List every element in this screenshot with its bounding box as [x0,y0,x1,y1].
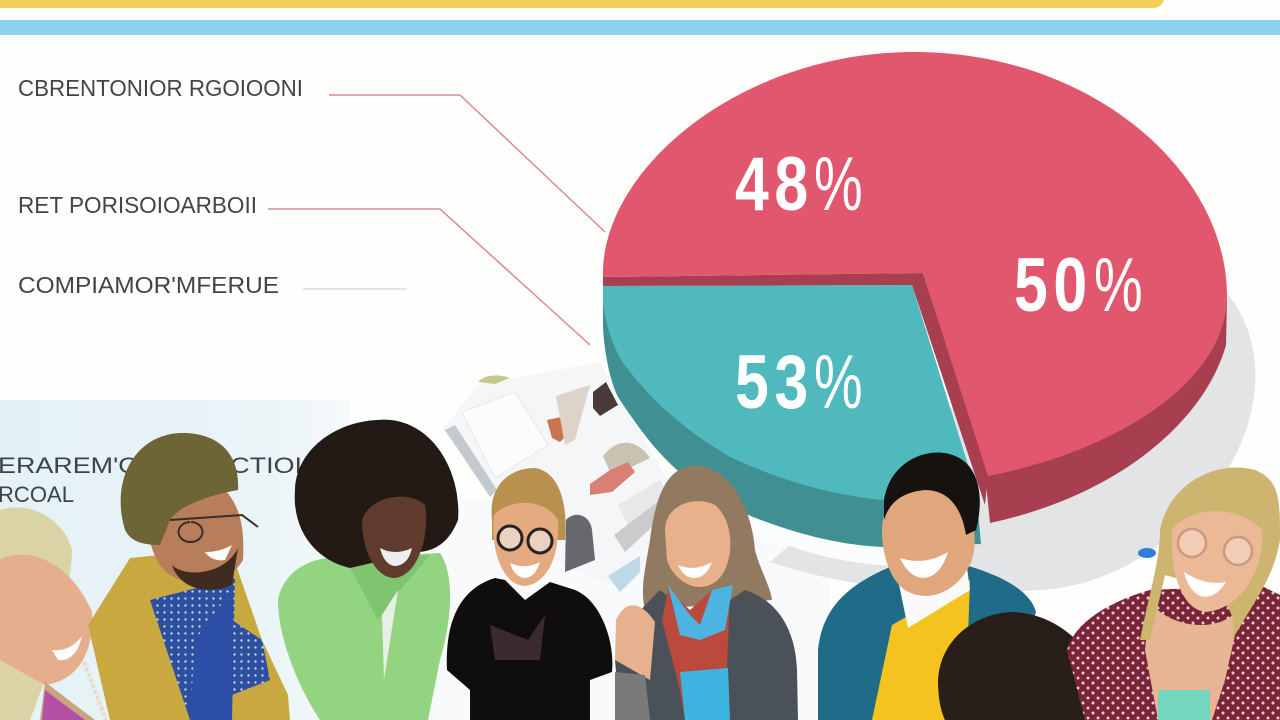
caption behind people: ERAREM'OH NCWCTIOI [0,453,302,478]
person: blonde woman with glasses in polka-dot jacket [1067,468,1280,720]
caption behind people [0,453,302,507]
person: woman with glasses in black shirt [447,468,612,720]
leader line: third category [303,288,407,290]
value: 48%: 48 [735,142,814,227]
pie: teal slice, 53% [603,285,978,500]
label: third category: COMPIAMOR'MFERUE [18,272,279,298]
blue header band [0,20,1280,35]
label: first category: CBRENTONIOR RGOIOONI [18,75,303,101]
background panel behind people [0,400,350,720]
pie: red slice, 48% and 50% [603,52,1227,476]
value: 48%: % [814,142,863,227]
person: woman with afro in green top [278,420,458,720]
leader line: first category [329,95,605,232]
person: man in blue cardigan and yellow shirt [818,453,1036,720]
top yellow bar [0,0,1164,8]
blue marker dot [1138,548,1156,558]
value: 53%: 53 [735,340,814,425]
pie drop shadow [770,270,1255,592]
person: woman in gray jacket with red and blue scarf [615,466,798,720]
person: blonde woman far left [0,507,106,720]
illustrated document collage [442,362,690,592]
value: 50%: % [1094,243,1143,328]
person: back of head in foreground [938,612,1102,720]
value: 48% [735,142,863,227]
pie: teal side wall [603,303,981,547]
person: man in mustard jacket [88,433,290,720]
leader line: second category [268,209,590,345]
caption behind people: RCOAL [0,482,74,507]
value: 53% [735,340,863,425]
pie: dark red inner edge [603,273,988,505]
value: 53%: % [814,340,863,425]
value: 50% [1014,243,1143,328]
white crescent under pie [730,500,905,566]
3D pie chart [603,52,1227,547]
pie: red side wall [985,300,1227,523]
label: second category: RET PORISOIOARBOII [18,192,257,218]
lower background panel [350,500,830,720]
value: 50%: 50 [1014,243,1093,328]
